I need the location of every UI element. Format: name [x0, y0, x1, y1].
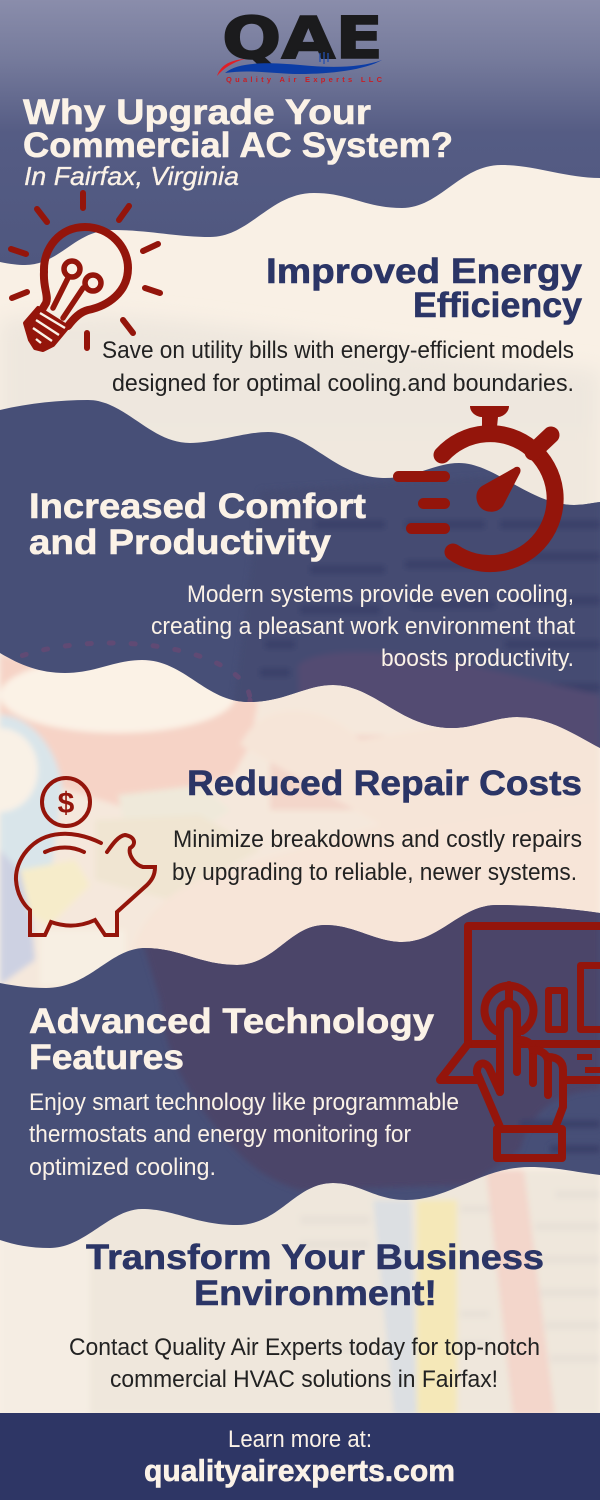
title	[23, 93, 453, 165]
footer band	[0, 1413, 600, 1500]
text: comfort body: Modern systems provide even cooling,	[187, 581, 574, 608]
heading: improved energy efficiency	[266, 252, 583, 325]
middle navy wave	[0, 390, 600, 760]
logo swoosh blue	[225, 60, 382, 74]
text: repair costs body: Minimize breakdowns and costly repairs	[173, 826, 582, 853]
icon: hand touching laptop chart	[440, 926, 600, 1158]
icon: piggy bank with coin	[16, 778, 155, 935]
text: call to action: Contact Quality Air Experts today for top-notch	[69, 1334, 540, 1361]
heading: advanced technology features: Advanced Technology	[29, 1002, 435, 1041]
text: call to action	[69, 1334, 540, 1393]
logo vent mark	[320, 52, 328, 64]
heading: reduced repair costs: Reduced Repair Costs	[187, 764, 582, 803]
heading: increased comfort and productivity: and Productivity	[29, 523, 332, 562]
heading: advanced technology features: Features	[29, 1038, 184, 1077]
icon: stopwatch	[393, 406, 555, 564]
text: technology body: optimized cooling.	[29, 1154, 216, 1181]
text: energy efficiency body: designed for optimal cooling.and boundaries.	[112, 370, 574, 397]
footer: learn more: Learn more at:	[228, 1426, 372, 1453]
text: comfort body: boosts productivity.	[381, 645, 574, 672]
heading: improved energy efficiency: Efficiency	[413, 286, 583, 325]
text: technology body: thermostats and energy monitoring for	[29, 1121, 411, 1148]
heading: advanced technology features	[29, 1002, 435, 1077]
logo swoosh red	[217, 59, 245, 76]
text: repair costs body: by upgrading to reliable, newer systems.	[172, 859, 577, 886]
text: repair costs body	[172, 826, 582, 886]
logo tagline: Quality Air Experts LLC	[226, 75, 383, 84]
heading: increased comfort and productivity	[29, 487, 366, 562]
text: comfort body	[151, 581, 575, 672]
icon: piggy bank with coin: $	[58, 787, 75, 820]
footer: website: qualityairexperts.com	[144, 1453, 455, 1488]
logo	[217, 4, 383, 84]
text: call to action: commercial HVAC solutions in Fairfax!	[110, 1366, 498, 1393]
heading: transform your business environment	[86, 1238, 544, 1313]
heading: increased comfort and productivity: Increased Comfort	[29, 487, 366, 526]
text: technology body: Enjoy smart technology like programmable	[29, 1089, 459, 1116]
heading: transform your business environment: Environment!	[194, 1274, 437, 1313]
heading: improved energy efficiency: Improved Energy	[266, 252, 583, 291]
text: energy efficiency body: Save on utility bills with energy-efficient models	[102, 337, 574, 364]
lower navy wave	[0, 900, 600, 1260]
text: technology body	[29, 1089, 459, 1181]
title: Why Upgrade Your	[23, 93, 371, 132]
text: energy efficiency body	[102, 337, 574, 397]
subtitle: In Fairfax, Virginia	[24, 161, 239, 191]
title: Commercial AC System?	[23, 126, 453, 165]
heading: transform your business environment: Transform Your Business	[86, 1238, 544, 1277]
top navy wave	[0, 0, 600, 265]
text: comfort body: creating a pleasant work environment that	[151, 613, 575, 640]
icon: light bulb	[11, 193, 160, 350]
logo: QAE	[222, 4, 383, 72]
